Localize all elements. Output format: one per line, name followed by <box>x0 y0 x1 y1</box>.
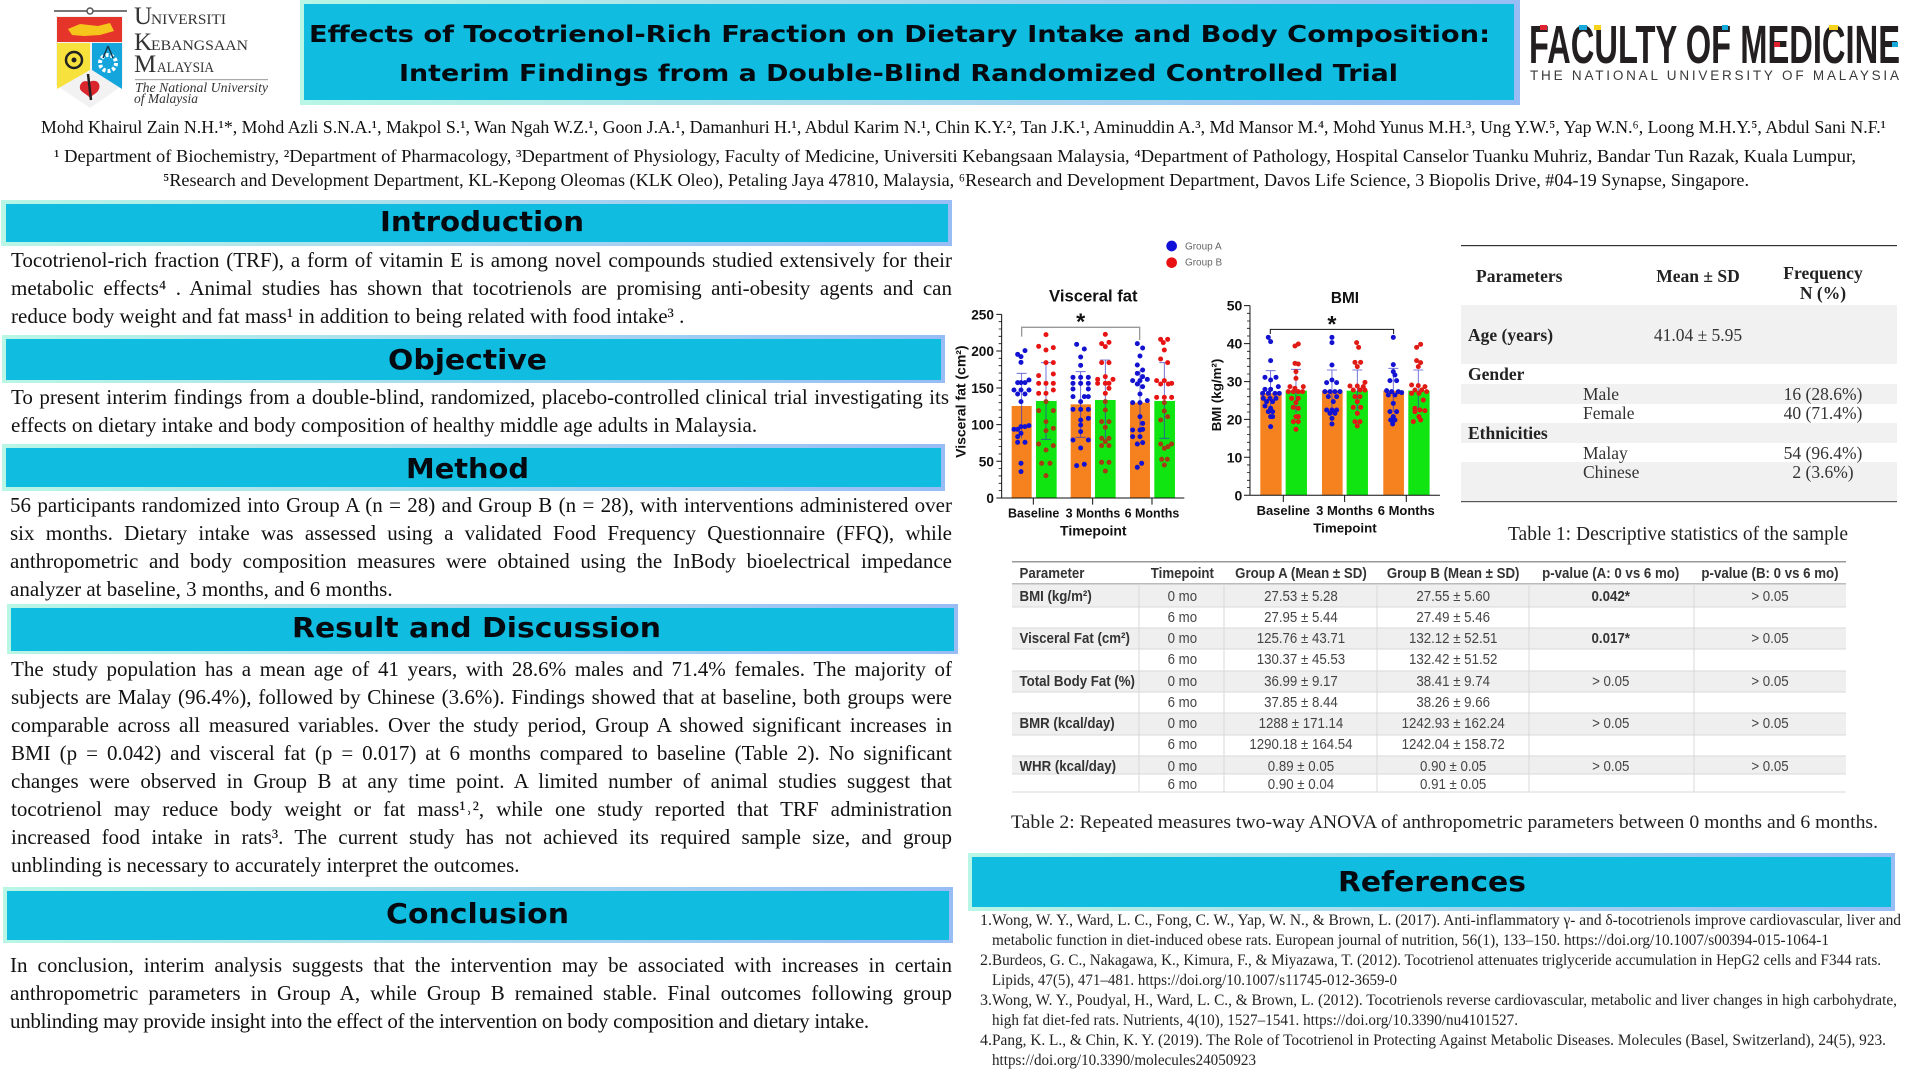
table 1: descriptive statistics <box>1461 245 1897 502</box>
references list: high fat diet-fed rats. Nutrients, 4(10), 1527–1541. https://doi.org/10.3390/nu4101527. <box>992 1012 1518 1029</box>
table 2: repeated measures ANOVA: Parameter <box>1020 565 1085 582</box>
bar chart: BMI: 6 Months <box>1378 503 1435 518</box>
table 2: repeated measures ANOVA: 38.26 ± 9.66 <box>1416 694 1490 711</box>
table 2: repeated measures ANOVA: 27.95 ± 5.44 <box>1264 609 1338 626</box>
title banner <box>300 0 1520 105</box>
table 2: repeated measures ANOVA: 0 mo <box>1168 630 1197 647</box>
chart legend: Group B <box>1185 258 1223 269</box>
text block: method: anthropometric and body composition measures were obtained using the InBody bioelectrical impedance <box>10 549 952 573</box>
table 2: repeated measures ANOVA: Timepoint <box>1151 565 1214 582</box>
heading: Objective: Objective <box>388 343 547 376</box>
references list: 4. <box>980 1032 992 1049</box>
university wordmark: U <box>134 3 152 30</box>
references list: https://doi.org/10.3390/molecules24050923 <box>992 1052 1256 1069</box>
table 2: repeated measures ANOVA: 132.12 ± 52.51 <box>1409 630 1498 647</box>
table 1: descriptive statistics: N (%) <box>1800 283 1846 303</box>
table 2: repeated measures ANOVA: 0.042* <box>1592 588 1630 605</box>
references list: 1. <box>980 912 992 929</box>
table 2: repeated measures ANOVA: 130.37 ± 45.53 <box>1257 651 1345 668</box>
table 1: descriptive statistics: Parameters <box>1476 266 1563 286</box>
bar chart: BMI: 10 <box>1227 449 1243 465</box>
heading: Method <box>2 444 945 491</box>
bar chart: visceral fat: 0 <box>986 491 994 506</box>
text block: objective: To present interim findings from a double-blind, randomized, placebo-controlled clinical trial investigating its <box>11 385 949 409</box>
table 2: repeated measures ANOVA: 27.55 ± 5.60 <box>1416 588 1490 605</box>
text block: result and discussion: changes were observed in Group B at any time point. A limited number of animal studies suggest that <box>11 769 952 793</box>
bar chart: BMI: * <box>1327 311 1337 337</box>
table 1: descriptive statistics: Frequency <box>1783 263 1863 283</box>
bar chart: visceral fat: Baseline <box>1008 506 1059 520</box>
bar chart: visceral fat: * <box>1076 308 1086 334</box>
text block: introduction: metabolic effects⁴ . Animal studies has shown that tocotrienols are promising anti-obesity agents and can <box>11 276 952 300</box>
table 2: repeated measures ANOVA: 36.99 ± 9.17 <box>1264 673 1338 690</box>
text block: conclusion: unblinding may provide insight into the effect of the intervention on body composition and dietary intake. <box>10 1009 869 1033</box>
bar chart: visceral fat: 200 <box>971 344 994 359</box>
table 2: repeated measures ANOVA: > 0.05 <box>1751 758 1789 775</box>
table 1: descriptive statistics: Malay <box>1583 443 1628 463</box>
table 2: repeated measures ANOVA: 1288 ± 171.14 <box>1259 715 1343 732</box>
bar chart: visceral fat: 250 <box>971 307 994 322</box>
table 1: descriptive statistics: 16 (28.6%) <box>1784 384 1863 404</box>
references list: Lipids, 47(5), 471–481. https://doi.org/10.1007/s11745-012-3659-0 <box>992 972 1397 989</box>
title banner: Interim Findings from a Double-Blind Randomized Controlled Trial <box>399 61 1398 87</box>
chart legend <box>1166 241 1223 269</box>
table 2: repeated measures ANOVA: 6 mo <box>1168 694 1197 711</box>
table 2: repeated measures ANOVA: 0.91 ± 0.05 <box>1420 776 1486 793</box>
table 2: repeated measures ANOVA: > 0.05 <box>1592 715 1629 732</box>
logo: Universiti Kebangsaan Malaysia <box>54 3 269 108</box>
text block: result and discussion: increased food intake in rats³. The current study has not achieved its required sample size, and group <box>11 825 952 849</box>
table 2: repeated measures ANOVA: 1242.93 ± 162.24 <box>1402 715 1505 732</box>
authors and affiliations: ¹ Department of Biochemistry, ²Department of Pharmacology, ³Department of Physiology, Faculty of Medicine, Universiti Kebangsaan Malaysia, ⁴Department of Pathology, Hospital Canselor Tuanku Muhriz, Bandar Tun Razak, Kuala Lumpur, <box>54 146 1856 166</box>
table 2: repeated measures ANOVA: 0 mo <box>1168 673 1197 690</box>
bar chart: BMI: Baseline <box>1257 503 1310 518</box>
heading: Conclusion <box>3 887 953 943</box>
university wordmark: ALAYSIA <box>157 60 214 76</box>
heading: Method: Method <box>406 452 529 485</box>
bar chart: BMI: BMI (kg/m²) <box>1209 359 1224 431</box>
table 2: repeated measures ANOVA: 0.017* <box>1592 630 1630 647</box>
bar chart: BMI: 30 <box>1227 374 1243 390</box>
references list: 3. <box>980 992 992 1009</box>
text block: result and discussion <box>11 657 952 877</box>
university wordmark: M <box>134 51 156 78</box>
bar chart: visceral fat: Timepoint <box>1060 522 1127 538</box>
heading: Objective <box>2 335 945 383</box>
table 2 caption: Table 2: Repeated measures two-way ANOVA of anthropometric parameters between 0 months and 6 months. <box>1011 812 1878 833</box>
table 2: repeated measures ANOVA: 1290.18 ± 164.54 <box>1249 736 1353 753</box>
text block: method: six months. Dietary intake was assessed using a validated Food Frequency Questionnaire (FFQ), while <box>10 521 952 545</box>
table 2: repeated measures ANOVA: > 0.05 <box>1592 758 1629 775</box>
table 2: repeated measures ANOVA: 1242.04 ± 158.72 <box>1402 736 1505 753</box>
text block: result and discussion: comparable across all measured variables. Over the study period, Group A showed significant increases in <box>11 713 952 737</box>
table 1: descriptive statistics: Male <box>1583 384 1619 404</box>
table 2: repeated measures ANOVA: WHR (kcal/day) <box>1020 758 1116 775</box>
heading: Result and Discussion: Result and Discussion <box>292 611 661 644</box>
text block: conclusion: anthropometric parameters in Group A, while Group B remained stable. Final outcomes following group <box>10 981 952 1005</box>
table 2: repeated measures ANOVA: Group B (Mean ± SD) <box>1387 565 1520 582</box>
bar chart: BMI: BMI <box>1331 290 1359 307</box>
heading: References <box>968 853 1895 911</box>
bar chart: visceral fat: Visceral fat <box>1049 286 1138 305</box>
text block: result and discussion: subjects are Malay (96.4%), followed by Chinese (3.6%). Findings showed that at baseline, both groups were <box>11 685 952 709</box>
bar chart: BMI: 3 Months <box>1316 503 1373 518</box>
table 2: repeated measures ANOVA: 0.90 ± 0.05 <box>1420 758 1486 775</box>
table 1: descriptive statistics: 54 (96.4%) <box>1784 443 1863 463</box>
text block: objective <box>11 385 949 437</box>
table 2: repeated measures ANOVA: > 0.05 <box>1751 630 1789 647</box>
table 1: descriptive statistics: Mean ± SD <box>1656 266 1740 286</box>
table 2: repeated measures ANOVA: 0 mo <box>1168 715 1197 732</box>
references list <box>980 912 1901 1069</box>
table 2: repeated measures ANOVA: > 0.05 <box>1751 673 1789 690</box>
table 2: repeated measures ANOVA: 6 mo <box>1168 609 1197 626</box>
references list: Wong, W. Y., Poudyal, H., Ward, L. C., & Brown, L. (2012). Tocotrienols reverse cardiovascular, metabolic and liver changes in high carbohydrate, <box>992 992 1897 1009</box>
table 2: repeated measures ANOVA: 27.53 ± 5.28 <box>1264 588 1338 605</box>
bar chart: BMI <box>1209 290 1440 536</box>
chart legend: Group A <box>1185 241 1222 252</box>
table 2: repeated measures ANOVA: 37.85 ± 8.44 <box>1264 694 1338 711</box>
table 1: descriptive statistics: Ethnicities <box>1468 423 1548 443</box>
bar chart: visceral fat <box>952 286 1184 538</box>
text block: conclusion: In conclusion, interim analysis suggests that the intervention may be associated with increases in certain <box>10 953 952 977</box>
authors and affiliations: ⁵Research and Development Department, KL-Kepong Oleomas (KLK Oleo), Petaling Jaya 47810, Malaysia, ⁶Research and Development Department, Davos Life Science, 3 Biopolis Drive, #04-19 Synapse, Singapore. <box>163 170 1749 191</box>
table 2: repeated measures ANOVA: Total Body Fat (%) <box>1020 673 1135 690</box>
text block: conclusion <box>10 953 952 1033</box>
table 2: repeated measures ANOVA: 6 mo <box>1168 651 1197 668</box>
university wordmark: NIVERSITI <box>151 12 226 28</box>
heading: Introduction: Introduction <box>380 205 584 238</box>
references list: Burdeos, G. C., Nakagawa, K., Kimura, F., & Miyazawa, T. (2012). Tocotrienol attenuates triglyceride accumulation in HepG2 cells and F344 rats. <box>992 952 1881 969</box>
title banner: Effects of Tocotrienol-Rich Fraction on Dietary Intake and Body Composition: <box>309 22 1490 48</box>
text block: objective: effects on dietary intake and body composition of healthy middle age adults in Malaysia. <box>11 413 757 437</box>
logo: Faculty of Medicine: THE NATIONAL UNIVERSITY OF MALAYSIA <box>1530 68 1899 83</box>
table 2: repeated measures ANOVA: > 0.05 <box>1751 715 1789 732</box>
heading: Conclusion: Conclusion <box>386 897 569 930</box>
text block: method: analyzer at baseline, 3 months, and 6 months. <box>10 577 393 601</box>
icon: university crest <box>54 8 127 108</box>
table 1: descriptive statistics: Age (years) <box>1468 325 1553 345</box>
table 2: repeated measures ANOVA: 6 mo <box>1168 776 1197 793</box>
bar chart: visceral fat: 6 Months <box>1125 506 1179 520</box>
text block: result and discussion: tocotrienol may reduce body weight or fat mass¹˒², while one study reported that TRF administration <box>11 797 952 821</box>
university wordmark: of Malaysia <box>134 92 198 107</box>
heading: Introduction <box>1 200 952 246</box>
references list: 2. <box>980 952 992 969</box>
table 2: repeated measures ANOVA: 132.42 ± 51.52 <box>1409 651 1498 668</box>
table 2: repeated measures ANOVA: > 0.05 <box>1751 588 1789 605</box>
bar chart: BMI: 0 <box>1235 487 1243 503</box>
bar chart: BMI: 40 <box>1227 336 1243 352</box>
references list: Wong, W. Y., Ward, L. C., Fong, C. W., Yap, W. N., & Brown, L. (2017). Anti-inflammatory γ- and δ-tocotrienols improve cardiovascular, liver and <box>992 912 1901 929</box>
bar chart: BMI: 50 <box>1227 298 1243 314</box>
table 2: repeated measures ANOVA: BMR (kcal/day) <box>1020 715 1115 732</box>
university wordmark: K <box>134 29 152 56</box>
text block: result and discussion: unblinding is necessary to accurately interpret the outcomes. <box>11 853 520 877</box>
table 2: repeated measures ANOVA: 0 mo <box>1168 758 1197 775</box>
bar chart: visceral fat: 100 <box>971 418 994 433</box>
authors and affiliations: Mohd Khairul Zain N.H.¹*, Mohd Azli S.N.A.¹, Makpol S.¹, Wan Ngah W.Z.¹, Goon J.A.¹, Damanhuri H.¹, Abdul Karim N.¹, Chin K.Y.², Tan J.K.¹, Aminuddin A.³, Md Mansor M.⁴, Mohd Yunus M.H.³, Ung Y.W.⁵, Yap W.N.⁶, Loong M.H.Y.⁵, Abdul Sani N.F.¹ <box>41 117 1886 137</box>
university wordmark: The National University <box>135 81 269 96</box>
references list: Pang, K. L., & Chin, K. Y. (2019). The Role of Tocotrienol in Protecting Against Metabolic Diseases. Molecules (Basel, Switzerland), 24(5), 923. <box>992 1032 1886 1049</box>
bar chart: visceral fat: 150 <box>971 381 994 396</box>
table 1: descriptive statistics: 40 (71.4%) <box>1784 403 1863 423</box>
table 1 caption: Table 1: Descriptive statistics of the sample <box>1508 524 1848 545</box>
text block: result and discussion: The study population has a mean age of 41 years, with 28.6% males and 71.4% females. The majority of <box>11 657 952 681</box>
table 2: repeated measures ANOVA: > 0.05 <box>1592 673 1629 690</box>
university wordmark: EBANGSAAN <box>151 38 248 54</box>
bar chart: visceral fat: 3 Months <box>1066 506 1120 520</box>
table 2: repeated measures ANOVA: Group A (Mean ± SD) <box>1235 565 1367 582</box>
table 2: repeated measures ANOVA: 0.89 ± 0.05 <box>1268 758 1334 775</box>
table 1: descriptive statistics: 41.04 ± 5.95 <box>1654 325 1742 345</box>
table 1: descriptive statistics: Chinese <box>1583 462 1640 482</box>
bar chart: visceral fat: 50 <box>979 454 994 469</box>
table 2: repeated measures ANOVA: 125.76 ± 43.71 <box>1257 630 1345 647</box>
table 2: repeated measures ANOVA: 0.90 ± 0.04 <box>1268 776 1334 793</box>
authors and affiliations <box>41 117 1886 191</box>
table 1: descriptive statistics: Gender <box>1468 364 1525 384</box>
table 2: repeated measures ANOVA: 0 mo <box>1168 588 1197 605</box>
university wordmark <box>134 3 269 107</box>
bar chart: BMI: Timepoint <box>1313 521 1377 536</box>
text block: introduction: reduce body weight and fat mass¹ in addition to being related with food intake³ . <box>11 304 684 328</box>
table 2: repeated measures ANOVA <box>1012 561 1846 793</box>
text block: method: 56 participants randomized into Group A (n = 28) and Group B (n = 28), with interventions administered over <box>10 493 952 517</box>
text block: introduction <box>11 248 952 328</box>
text block: introduction: Tocotrienol-rich fraction (TRF), a form of vitamin E is among novel compounds studied extensively for their <box>11 248 952 272</box>
bar chart: visceral fat: Visceral fat (cm²) <box>952 345 968 458</box>
table 2: repeated measures ANOVA: p-value (B: 0 vs 6 mo) <box>1701 565 1839 582</box>
bar chart: BMI: 20 <box>1227 411 1243 427</box>
table 2: repeated measures ANOVA: 38.41 ± 9.74 <box>1416 673 1490 690</box>
text block: method <box>10 493 952 601</box>
table 2: repeated measures ANOVA: Visceral Fat (cm²) <box>1020 630 1130 647</box>
table 2: repeated measures ANOVA: 27.49 ± 5.46 <box>1416 609 1490 626</box>
heading: References: References <box>1338 865 1526 898</box>
table 2: repeated measures ANOVA: 6 mo <box>1168 736 1197 753</box>
heading: Result and Discussion <box>7 604 958 654</box>
table 1: descriptive statistics: 2 (3.6%) <box>1792 462 1854 482</box>
table 2: repeated measures ANOVA: BMI (kg/m²) <box>1020 588 1092 605</box>
table 1: descriptive statistics: Female <box>1583 403 1635 423</box>
table 2: repeated measures ANOVA: p-value (A: 0 vs 6 mo) <box>1542 565 1680 582</box>
references list: metabolic function in diet-induced obese rats. European journal of nutrition, 56(1), 133–150. https://doi.org/10.1007/s00394-015-1064-1 <box>992 932 1829 949</box>
text block: result and discussion: BMI (p = 0.042) and visceral fat (p = 0.017) at 6 months compared to baseline (Table 2). No significant <box>11 741 952 765</box>
